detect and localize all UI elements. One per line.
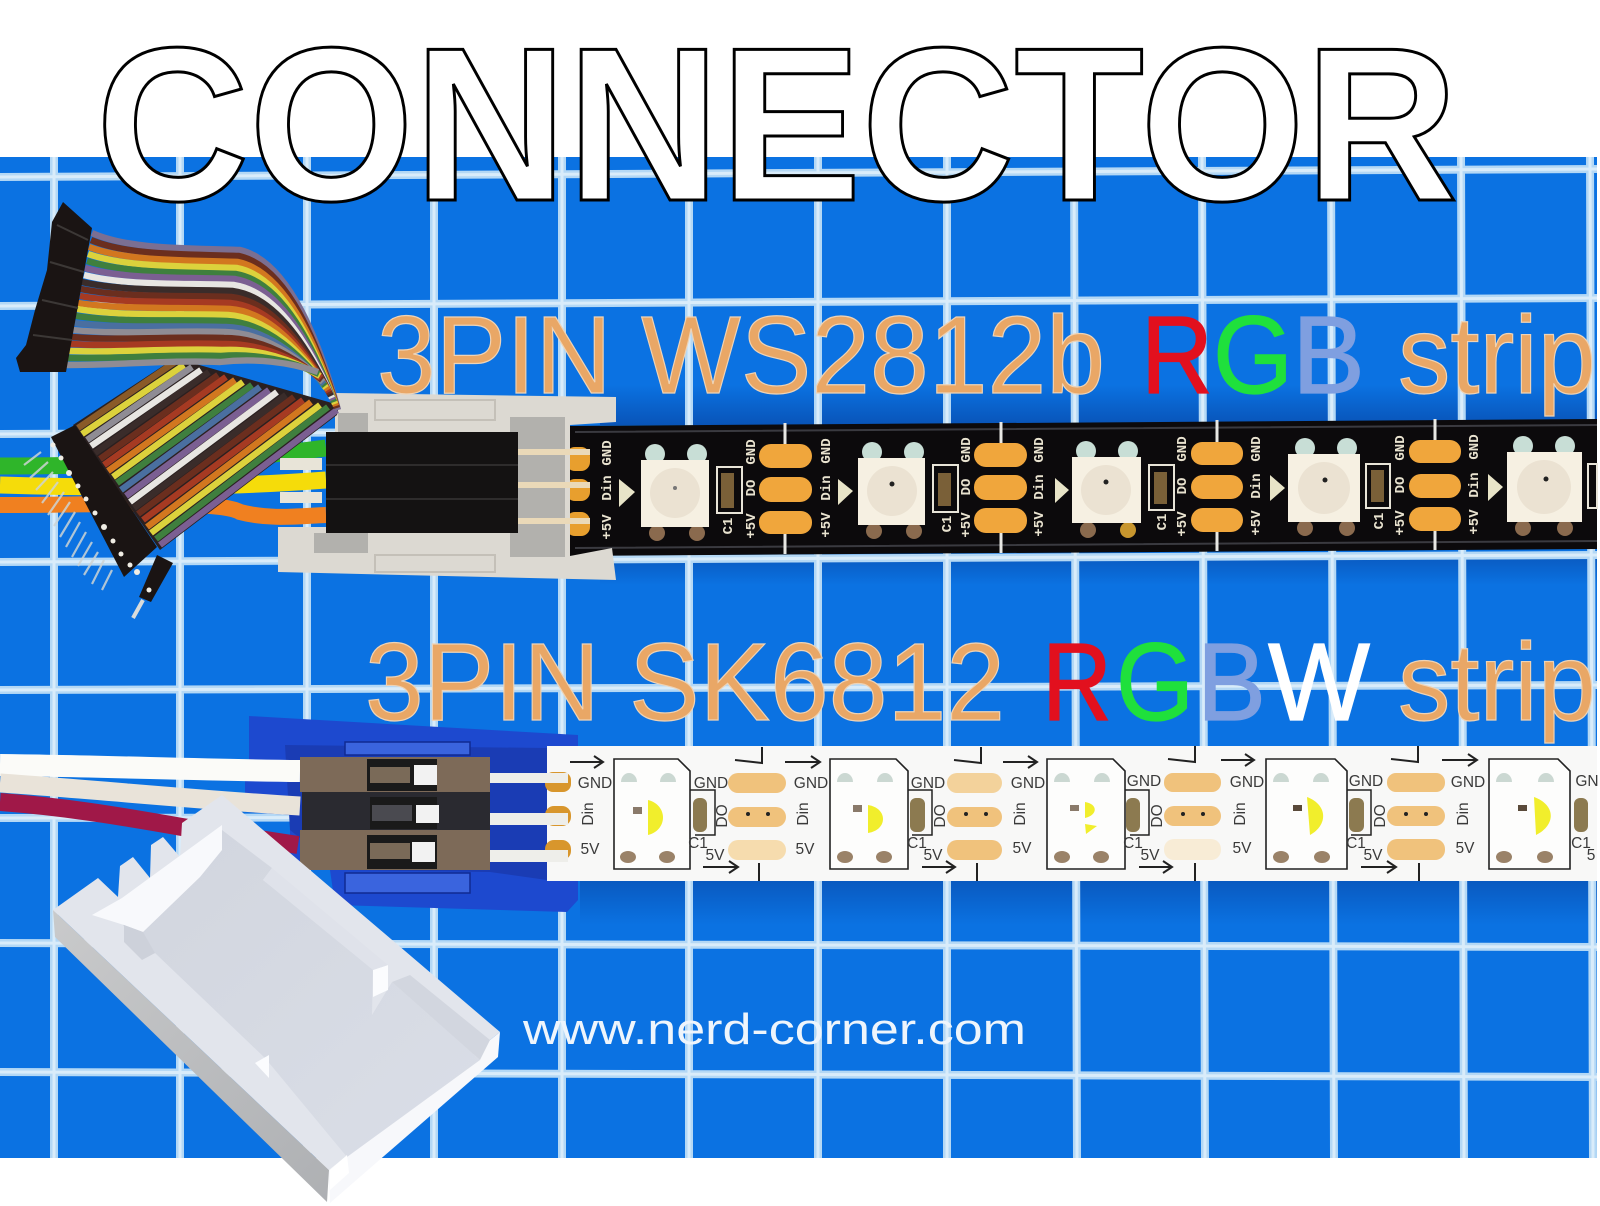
silkscreen labels: black strip: DO xyxy=(959,479,975,495)
silkscreen labels: black strip: C1 xyxy=(940,516,956,532)
silkscreen labels: white strip: C1 xyxy=(907,835,927,852)
subtitle: 3PIN WS2812b RGB strip xyxy=(377,294,1596,417)
white LED module 2 xyxy=(830,759,932,869)
silkscreen labels: black strip: Din xyxy=(600,475,616,501)
silkscreen labels: white strip: Din xyxy=(795,802,812,826)
silkscreen labels: white strip: GND xyxy=(1230,774,1264,791)
silkscreen labels: black strip: +5V xyxy=(1467,509,1483,535)
upper ribbon strand xyxy=(66,233,338,410)
silkscreen labels: white strip: C1 xyxy=(1571,835,1591,852)
silkscreen labels: white strip: C1 xyxy=(1346,835,1366,852)
silkscreen labels: black strip: GND xyxy=(1032,437,1048,463)
silkscreen labels: white strip: GND xyxy=(1349,773,1383,790)
silkscreen labels: black strip: +5V xyxy=(600,514,616,540)
wire ferrules xyxy=(280,458,322,503)
blue 3D printed holder xyxy=(245,716,578,912)
silkscreen labels: white strip: GND xyxy=(694,775,728,792)
coloured wires: green, yellow, orange xyxy=(0,448,326,517)
silkscreen labels: white strip: GND xyxy=(1011,775,1045,792)
silkscreen labels: black strip: GND xyxy=(1175,436,1191,462)
subtitle: 3PIN WS2812b RGB strip: R xyxy=(1141,294,1213,417)
jumper housings on bottom strip xyxy=(300,757,568,870)
white LED module 3 xyxy=(1047,759,1149,869)
silkscreen labels: black strip: C1 xyxy=(1372,513,1388,529)
silkscreen labels: black strip: +5V xyxy=(1249,510,1265,536)
white LED module 5 xyxy=(1489,759,1588,869)
LED module 3 xyxy=(1055,441,1174,538)
silkscreen labels: black strip xyxy=(600,434,1483,540)
silkscreen labels: black strip: C1 xyxy=(721,518,737,534)
silkscreen labels: white strip: 5V xyxy=(581,841,600,858)
subtitle: 3PIN WS2812b RGB strip: G xyxy=(1213,294,1293,417)
silkscreen labels: black strip: +5V xyxy=(1175,511,1191,537)
silkscreen labels: black strip: +5V xyxy=(1032,511,1048,537)
silkscreen labels: white strip: DO xyxy=(932,804,949,828)
silkscreen labels: white strip: 5V xyxy=(1364,847,1383,864)
connector pins xyxy=(24,452,112,590)
silkscreen labels: white strip: 5V xyxy=(796,841,815,858)
silkscreen labels: black strip: GND xyxy=(1249,436,1265,462)
silkscreen labels: white strip: GND xyxy=(794,775,828,792)
silkscreen labels: white strip: DO xyxy=(714,804,731,828)
direction arrows and cut marks xyxy=(570,746,1477,881)
silkscreen labels: white strip xyxy=(578,773,1599,864)
silkscreen labels: black strip: GND xyxy=(819,438,835,464)
subtitle: 3PIN SK6812 RGBW strip: B xyxy=(1197,621,1266,744)
LED module 1 xyxy=(619,444,742,541)
silkscreen labels: white strip: GND xyxy=(1451,774,1485,791)
silkscreen labels: black strip: DO xyxy=(744,480,760,496)
silkscreen labels: white strip: 5V xyxy=(924,847,943,864)
silkscreen labels: black strip: Din xyxy=(1032,474,1048,500)
silkscreen labels: black strip: +5V xyxy=(819,512,835,538)
silkscreen labels: white strip: 5V xyxy=(1233,840,1252,857)
silkscreen labels: black strip: DO xyxy=(1393,477,1409,493)
wires on bottom strip: white, cream, magenta xyxy=(0,765,300,845)
silkscreen labels: black strip: DO xyxy=(1175,478,1191,494)
silkscreen labels: black strip: Din xyxy=(1249,473,1265,499)
silkscreen labels: black strip: GND xyxy=(744,439,760,465)
subtitle: 3PIN SK6812 RGBW strip: strip xyxy=(1398,621,1596,744)
silkscreen labels: white strip: Din xyxy=(1232,802,1249,826)
silkscreen labels: white strip: GN xyxy=(1575,773,1599,790)
silkscreen labels: white strip: 5V xyxy=(1141,847,1160,864)
silkscreen labels: white strip: Din xyxy=(1012,802,1029,826)
silkscreen labels: white strip: Din xyxy=(580,802,597,826)
silkscreen labels: white strip: DO xyxy=(1149,804,1166,828)
subtitle: 3PIN SK6812 RGBW strip: G xyxy=(1116,621,1194,744)
white strip: SK6812 RGBW LED strip xyxy=(545,746,1599,881)
silkscreen labels: black strip: Din xyxy=(1467,472,1483,498)
silkscreen labels: black strip: +5V xyxy=(744,513,760,539)
silkscreen labels: black strip: GND xyxy=(1467,434,1483,460)
silkscreen labels: white strip: 5V xyxy=(1013,840,1032,857)
silkscreen labels: black strip: GND xyxy=(959,437,975,463)
subtitle: 3PIN SK6812 RGBW strip: 3PIN SK6812 xyxy=(365,621,1005,744)
3D printed white holder xyxy=(278,393,616,580)
website url: www.nerd-corner.com xyxy=(522,1005,1026,1054)
silkscreen labels: black strip: GND xyxy=(1393,435,1409,461)
lower ribbon strand xyxy=(73,358,339,550)
top strip: black WS2812b LED strip xyxy=(565,419,1597,556)
silkscreen labels: white strip: C1 xyxy=(1123,835,1143,852)
top jumper connector block xyxy=(16,202,92,372)
LED module 5 xyxy=(1488,436,1597,536)
silkscreen labels: white strip: Din xyxy=(1455,802,1472,826)
black pin connector on top strip xyxy=(326,432,590,533)
title: CONNECTOR xyxy=(96,3,1458,247)
subtitle: 3PIN SK6812 RGBW strip: R xyxy=(1042,621,1112,744)
silkscreen labels: white strip: 5 xyxy=(1587,847,1595,864)
silkscreen labels: black strip: +5V xyxy=(1393,510,1409,536)
lower jumper connector strip xyxy=(51,425,157,577)
silkscreen labels: black strip: C1 xyxy=(1155,514,1171,530)
subtitle: 3PIN WS2812b RGB strip: strip xyxy=(1398,294,1596,417)
silkscreen labels: white strip: GND xyxy=(578,775,612,792)
subtitle: 3PIN SK6812 RGBW strip: W xyxy=(1268,621,1370,744)
white LED module 1 xyxy=(614,759,715,869)
silkscreen labels: white strip: 5V xyxy=(706,847,725,864)
silkscreen labels: white strip: GND xyxy=(1127,773,1161,790)
LED module 2 xyxy=(838,442,958,539)
subtitle: 3PIN SK6812 RGBW strip xyxy=(365,621,1596,744)
3D model of the white connector case xyxy=(53,795,500,1203)
dupont ribbon cable xyxy=(16,202,339,618)
silkscreen labels: white strip: 5V xyxy=(1456,840,1475,857)
LED module 4 xyxy=(1270,438,1390,536)
subtitle: 3PIN WS2812b RGB strip: 3PIN WS2812b xyxy=(377,294,1105,417)
silkscreen labels: black strip: GND xyxy=(600,440,616,466)
subtitle: 3PIN WS2812b RGB strip: B xyxy=(1292,294,1365,417)
silkscreen labels: black strip: +5V xyxy=(959,512,975,538)
silkscreen labels: white strip: DO xyxy=(1372,804,1389,828)
silkscreen labels: black strip: Din xyxy=(819,475,835,501)
single loose jumper xyxy=(133,555,173,618)
white LED module 4 xyxy=(1266,759,1371,869)
silkscreen labels: white strip: GND xyxy=(911,775,945,792)
silkscreen labels: white strip: C1 xyxy=(688,835,708,852)
